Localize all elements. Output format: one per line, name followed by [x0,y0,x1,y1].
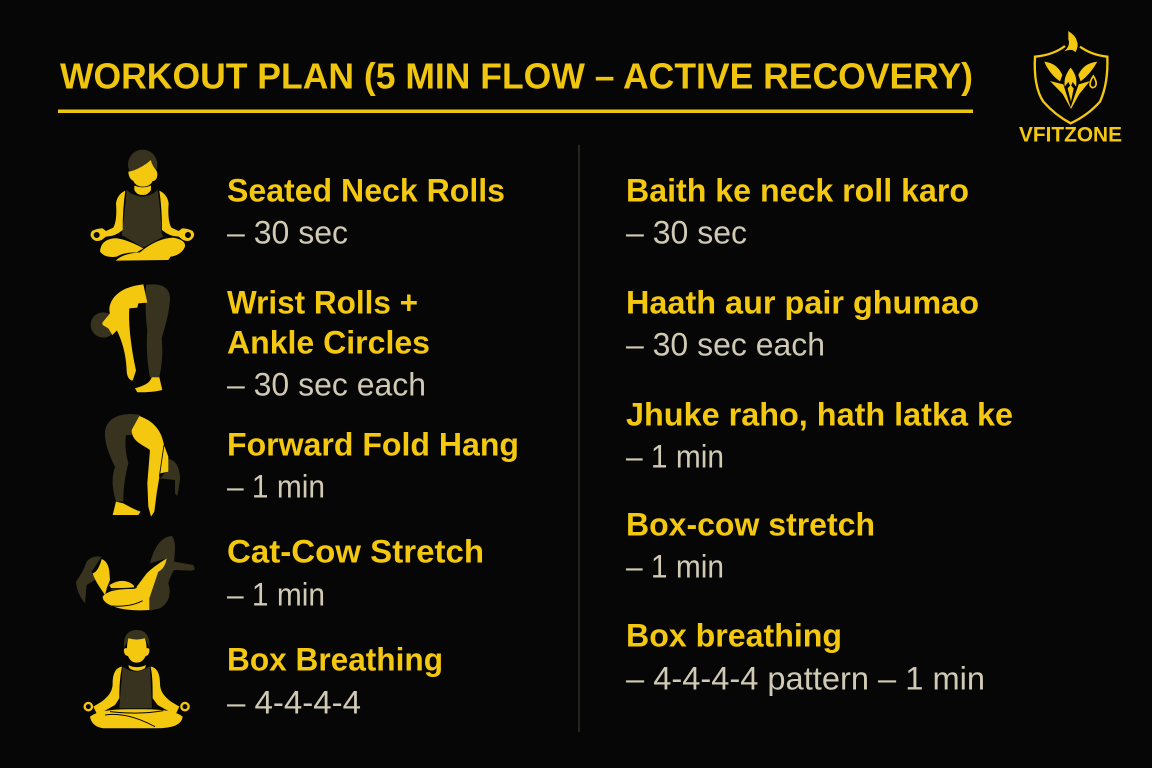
icon: wrist rolls and ankle circles [91,284,170,392]
title: WORKOUT PLAN (5 MIN FLOW – ACTIVE RECOVERY) [60,56,973,96]
item 1: – 30 sec [626,214,747,250]
exercise 1: – 30 sec [227,214,348,250]
item 3 [626,396,1013,474]
exercise 2: Wrist Rolls + [227,284,418,320]
exercise 3: Forward Fold Hang [227,426,519,462]
item 3: Jhuke raho, hath latka ke [626,396,1013,432]
right column: translated list [626,172,1013,696]
item 4 [626,506,875,584]
item 5: – 4-4-4-4 pattern – 1 min [626,660,985,696]
item 5 [626,618,985,696]
exercise 4: – 1 min [227,576,325,612]
exercise 2 [227,284,430,402]
left column: exercise list [227,172,519,720]
item 5: Box breathing [626,618,842,654]
icon: seated neck rolls [90,150,194,261]
item 2: – 30 sec each [626,326,825,362]
exercise 5: Box Breathing [227,642,443,678]
exercise 5 [227,642,443,720]
exercise 3 [227,426,519,504]
exercise 4 [227,534,484,612]
exercise 1 [227,172,505,250]
icon: box breathing [85,630,189,728]
item 1: Baith ke neck roll karo [626,172,969,208]
item 4: – 1 min [626,548,724,584]
item 2: Haath aur pair ghumao [626,284,979,320]
exercise 3: – 1 min [227,468,325,504]
exercise 2: – 30 sec each [227,366,426,402]
item 4: Box-cow stretch [626,506,875,542]
icon: forward fold hang [105,414,180,517]
item 1 [626,172,969,250]
exercise 2: Ankle Circles [227,324,430,360]
logo: VFITZONE: VFITZONE [1019,124,1122,146]
exercise 1: Seated Neck Rolls [227,172,505,208]
item 3: – 1 min [626,438,724,474]
item 2 [626,284,979,362]
logo: VFITZONE [1019,31,1122,146]
icon: cat-cow stretch [76,536,195,611]
exercise 4: Cat-Cow Stretch [227,534,484,570]
exercise 5: – 4-4-4-4 [227,684,361,720]
